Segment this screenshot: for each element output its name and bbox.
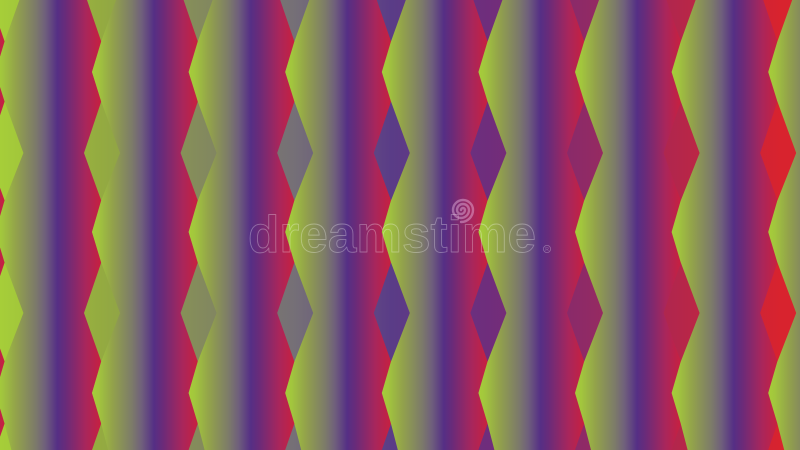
icon: registered mark (543, 245, 551, 253)
zigzag band 5 (382, 0, 488, 450)
zigzag band 6 (478, 0, 584, 450)
watermark (248, 200, 551, 264)
icon: registered mark: R (545, 247, 549, 253)
zigzag band 1 (0, 0, 101, 450)
zigzag band 4 (285, 0, 391, 450)
zigzag band 7 (575, 0, 681, 450)
zigzag band 8 (672, 0, 778, 450)
zigzag band 9 (768, 0, 800, 450)
zigzag band 2 (92, 0, 198, 450)
zigzag band 0 (0, 0, 5, 450)
icon: watermark spiral (453, 200, 473, 222)
watermark word: dreamstime (248, 206, 536, 264)
zigzag band 3 (189, 0, 295, 450)
